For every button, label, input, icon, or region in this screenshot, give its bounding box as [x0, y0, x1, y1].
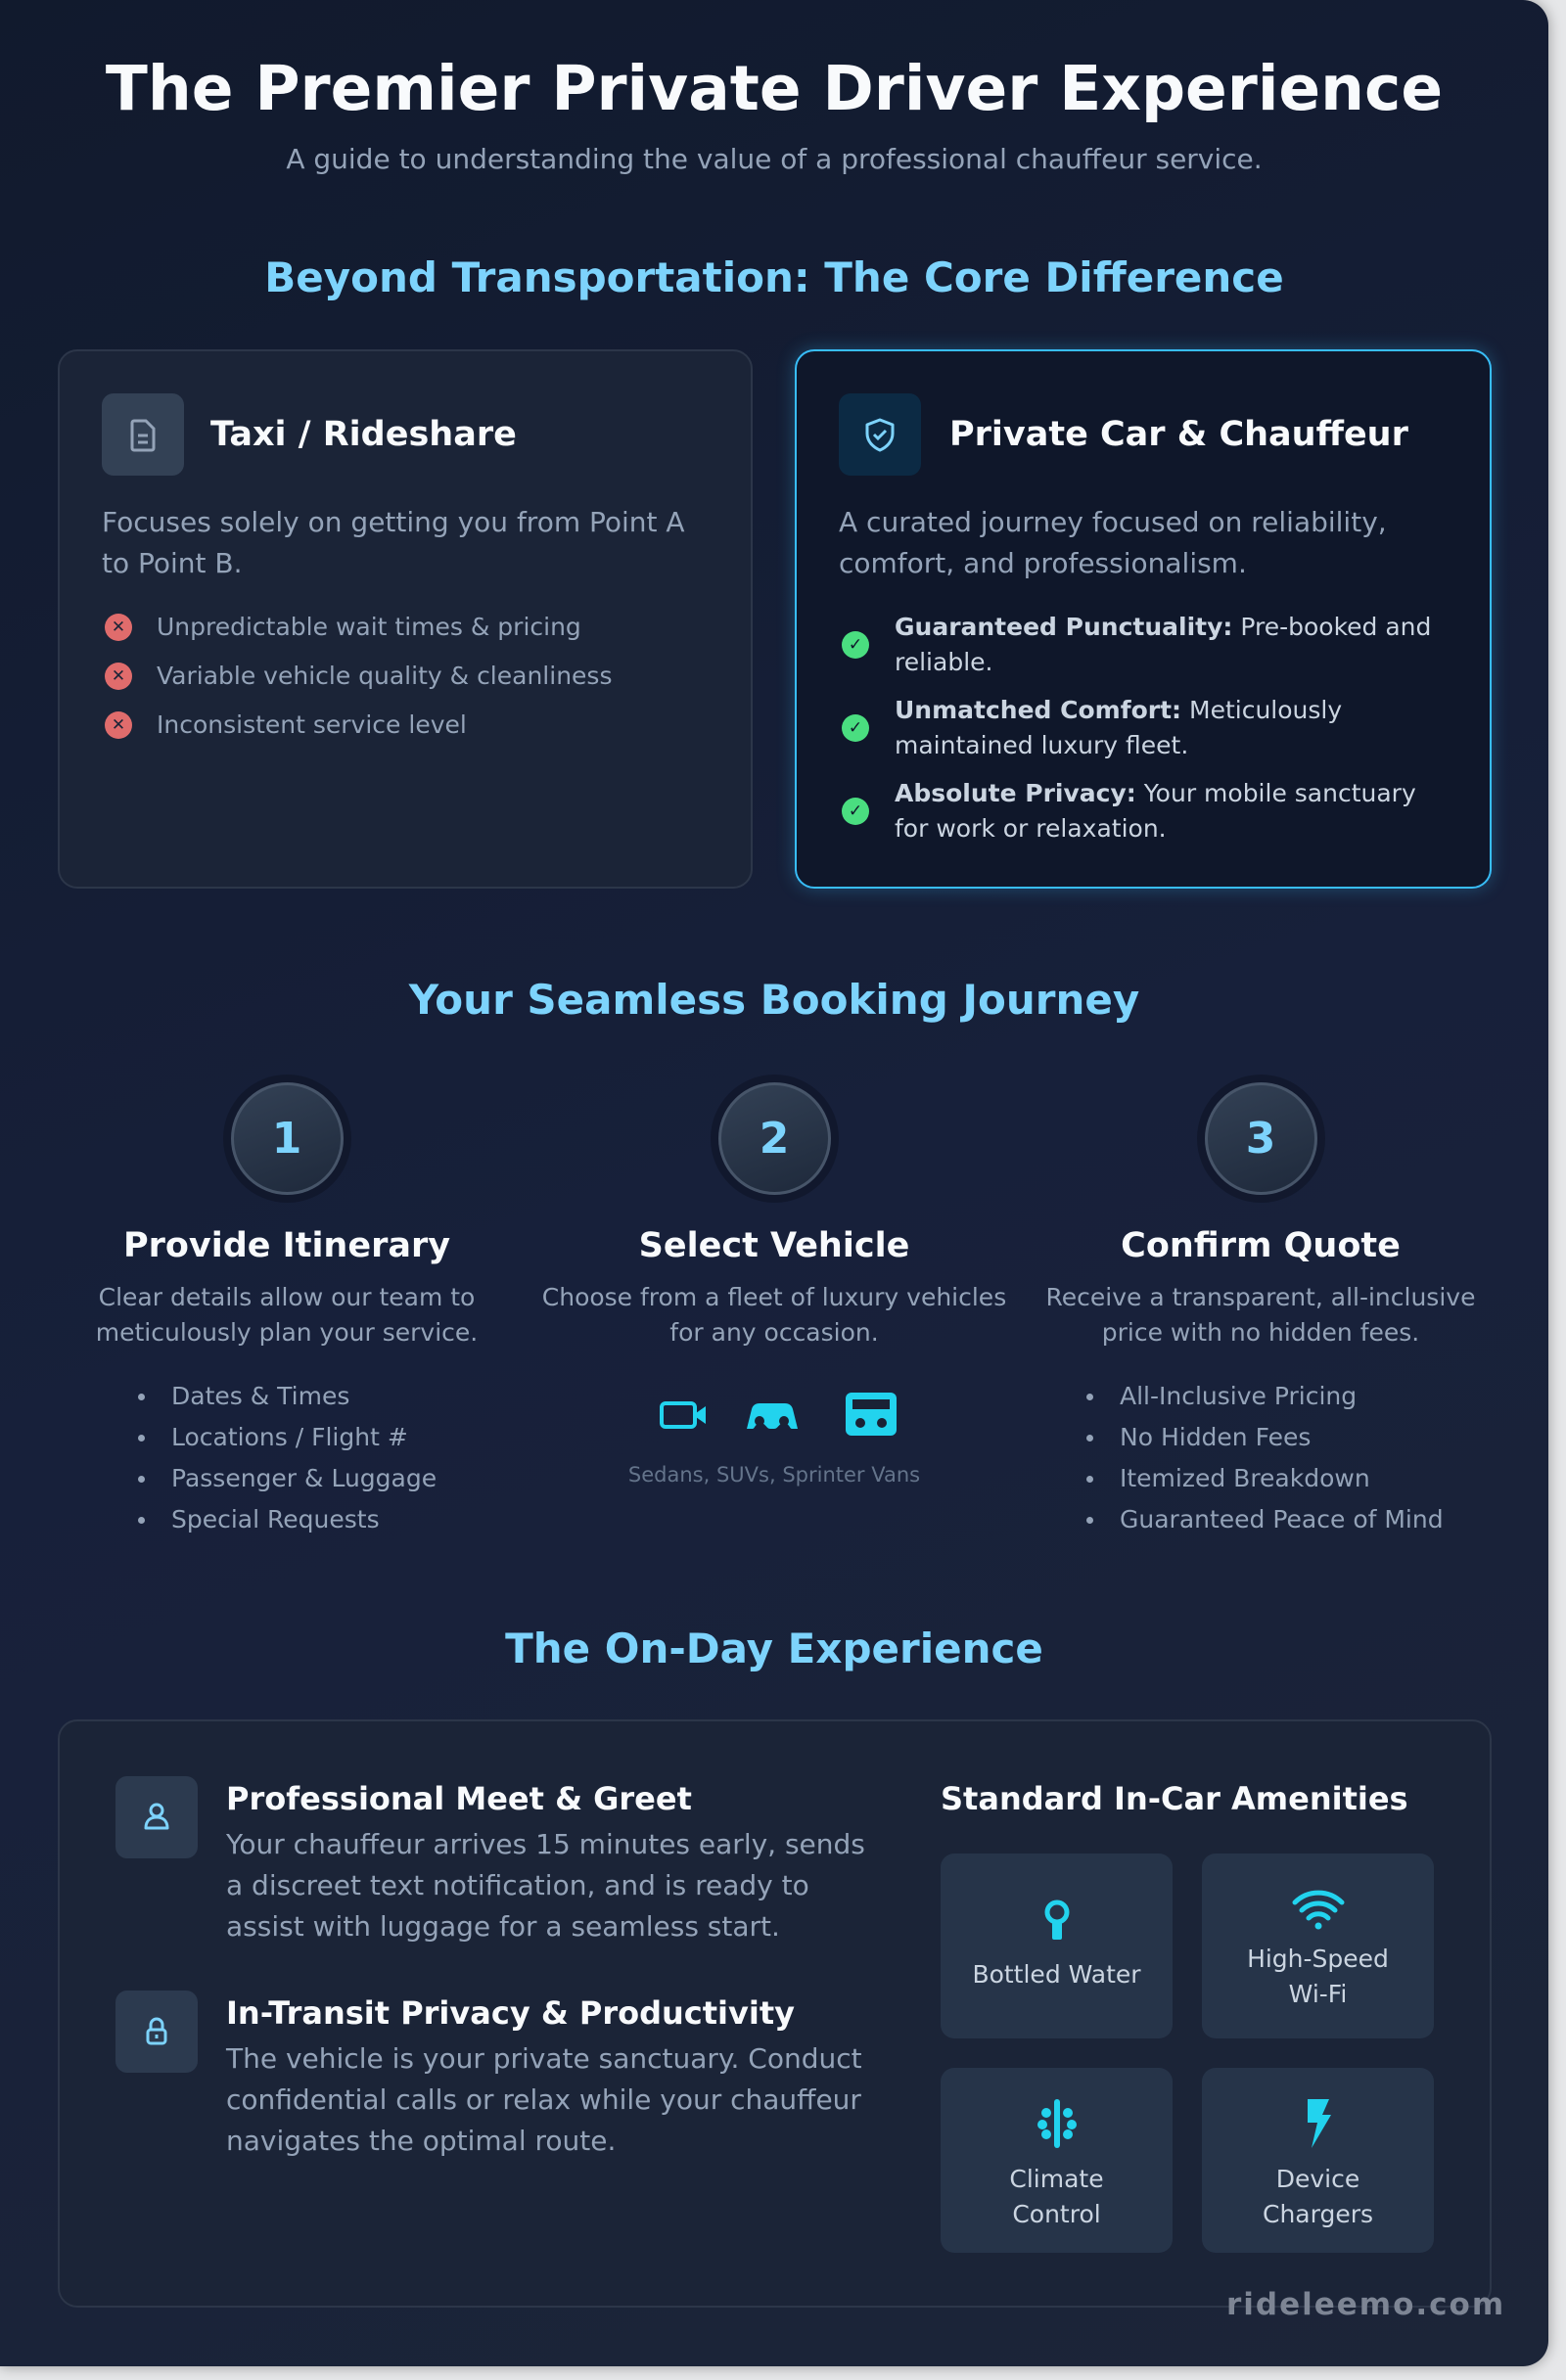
tile: wifi: Wi-Fi: [1289, 1980, 1347, 2008]
step title: Confirm Quote: [1121, 1226, 1401, 1265]
list: drawbacks: ✕: [112, 618, 125, 637]
list: drawbacks: ✕: [112, 666, 125, 686]
step 2: [542, 1075, 1006, 1487]
item: privacy: [115, 1991, 862, 2157]
tile: climate: Control: [1012, 2200, 1101, 2228]
bullet list: No Hidden Fees: [1120, 1423, 1311, 1451]
panel: private car chauffeur: [795, 349, 1492, 889]
step description: Clear details allow our team to meticulously plan your service.: [96, 1283, 478, 1347]
list: drawbacks: Variable vehicle quality & cleanliness: [157, 662, 612, 690]
list: benefits: ✓: [849, 718, 862, 738]
list: drawbacks: Inconsistent service level: [157, 710, 467, 739]
list: drawbacks: [105, 613, 612, 739]
title: The Premier Private Driver Experience: [106, 53, 1443, 124]
step title: Select Vehicle: [639, 1226, 909, 1265]
item title: Professional Meet & Greet: [226, 1780, 692, 1817]
tile: climate: Climate: [1009, 2165, 1104, 2193]
heading: core difference: Beyond Transportation: The Core Difference: [264, 253, 1284, 301]
card title: Private Car & Chauffeur: [949, 415, 1408, 454]
icon: wifi: [1292, 1891, 1345, 1930]
bullet list: Special Requests: [171, 1505, 380, 1533]
heading: booking journey: Your Seamless Booking Journey: [409, 976, 1139, 1024]
icon: document: [102, 393, 184, 476]
bullet list: [1086, 1382, 1444, 1533]
tile: bottled water: [941, 1854, 1173, 2038]
bullet list: Dates & Times: [171, 1382, 349, 1410]
panel: taxi rideshare: [58, 349, 753, 889]
bullet list: All-Inclusive Pricing: [1120, 1382, 1357, 1410]
step number circle: [718, 1082, 830, 1195]
icons: vehicles: [660, 1393, 897, 1436]
bullet list: Locations / Flight #: [171, 1423, 408, 1451]
list: benefits: Unmatched Comfort: Meticulously maintained luxury fleet.: [895, 696, 1342, 759]
list: benefits: ✓: [849, 635, 862, 655]
icon: person: [115, 1776, 198, 1858]
caption: Sedans, SUVs, Sprinter Vans: [628, 1463, 920, 1487]
tile: chargers: Chargers: [1263, 2200, 1373, 2228]
tile: chargers: [1202, 2068, 1434, 2253]
step description: Receive a transparent, all-inclusive price with no hidden fees.: [1046, 1283, 1475, 1347]
step description: Choose from a fleet of luxury vehicles for any occasion.: [542, 1283, 1006, 1347]
list: benefits: [842, 613, 1431, 843]
step title: Provide Itinerary: [123, 1226, 450, 1265]
tile: wifi: High-Speed: [1247, 1945, 1389, 1973]
step number circle: 1: [272, 1114, 301, 1164]
step 3: [1046, 1075, 1475, 1533]
step number circle: 3: [1246, 1114, 1275, 1164]
item text: The vehicle is your private sanctuary. Conduct confidential calls or relax while your chauffeur navigates the optimal route.: [226, 2042, 862, 2157]
card title: Taxi / Rideshare: [210, 415, 517, 454]
list: benefits: Guaranteed Punctuality: Pre-booked and reliable.: [895, 613, 1431, 676]
amenities heading: Standard In-Car Amenities: [941, 1780, 1408, 1817]
item title: In-Transit Privacy & Productivity: [226, 1994, 795, 2032]
watermark: rideleemo.com: [1226, 2287, 1505, 2322]
bullet list: [138, 1382, 437, 1533]
list: benefits: ✓: [849, 801, 862, 821]
icon: snowflake: [1037, 2099, 1077, 2148]
item: meet and greet: [115, 1776, 865, 1943]
step number circle: [231, 1082, 343, 1195]
panel: on-day experience: [58, 1719, 1492, 2308]
bullet list: Guaranteed Peace of Mind: [1120, 1505, 1444, 1533]
bullet list: Passenger & Luggage: [171, 1464, 437, 1492]
step number circle: 2: [760, 1114, 789, 1164]
list: drawbacks: Unpredictable wait times & pricing: [157, 613, 581, 641]
tile: wifi: [1202, 1854, 1434, 2038]
item text: Your chauffeur arrives 15 minutes early, sends a discreet text notification, and is ready to assist with luggage for a seamless start.: [226, 1828, 865, 1943]
icon: lock: [115, 1991, 198, 2073]
icon: lightning: [1308, 2099, 1331, 2148]
list: drawbacks: ✕: [112, 715, 125, 735]
subtitle: A guide to understanding the value of a professional chauffeur service.: [286, 143, 1263, 175]
tile: chargers: Device: [1276, 2165, 1359, 2193]
list: benefits: Absolute Privacy: Your mobile sanctuary for work or relaxation.: [895, 779, 1416, 843]
tile: bottled water: Bottled Water: [972, 1960, 1141, 1989]
description: A curated journey focused on reliability, comfort, and professionalism.: [839, 506, 1387, 579]
step 1: [96, 1075, 478, 1533]
tile: climate: [941, 2068, 1173, 2253]
description: Focuses solely on getting you from Point A to Point B.: [102, 506, 685, 579]
bullet list: Itemized Breakdown: [1120, 1464, 1370, 1492]
icon: water: [1045, 1900, 1069, 1940]
step number circle: [1204, 1082, 1317, 1195]
icon: shield: [839, 393, 921, 476]
heading: on-day experience: The On-Day Experience: [505, 1625, 1043, 1672]
